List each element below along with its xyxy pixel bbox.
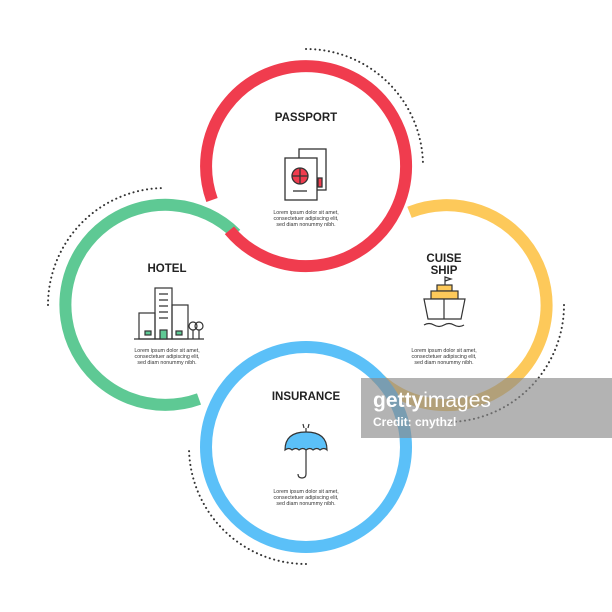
ring: hotel (green)	[65, 205, 236, 405]
heading: cruise ship: CUISE	[426, 253, 462, 265]
icon: ship	[424, 277, 465, 326]
heading: hotel: HOTEL	[148, 263, 186, 275]
icon: passport	[285, 149, 326, 200]
icon: hotel	[134, 288, 204, 339]
text: hotel: Lorem ipsum dolor sit amet,	[134, 348, 200, 354]
text: passport: Lorem ipsum dolor sit amet,	[273, 210, 339, 216]
ring: cruise ship (yellow)	[376, 205, 547, 405]
watermark band	[361, 378, 612, 438]
text: cruise ship: sed diam nonummy nibh.	[414, 360, 474, 366]
text: passport: sed diam nonummy nibh.	[276, 222, 336, 228]
icon: umbrella	[285, 424, 327, 478]
watermark band: Credit: cnythzl	[373, 415, 456, 429]
watermark band: gettyimages	[373, 389, 491, 412]
text: insurance: Lorem ipsum dolor sit amet,	[273, 489, 339, 495]
ring: insurance (blue)	[206, 347, 406, 547]
text: cruise ship: consectetuer adipiscing elit,	[411, 354, 477, 360]
text: insurance: consectetuer adipiscing elit,	[273, 495, 339, 501]
text: passport: consectetuer adipiscing elit,	[273, 216, 339, 222]
heading: insurance: INSURANCE	[272, 391, 341, 403]
text: hotel: sed diam nonummy nibh.	[137, 360, 197, 366]
text: hotel: consectetuer adipiscing elit,	[134, 354, 200, 360]
ring: passport (red)	[206, 66, 406, 266]
text: insurance: sed diam nonummy nibh.	[276, 501, 336, 507]
dotted arcs	[48, 49, 564, 564]
text: cruise ship: Lorem ipsum dolor sit amet,	[411, 348, 477, 354]
heading: cruise ship: SHIP	[431, 265, 458, 277]
heading: passport: PASSPORT	[275, 112, 337, 124]
